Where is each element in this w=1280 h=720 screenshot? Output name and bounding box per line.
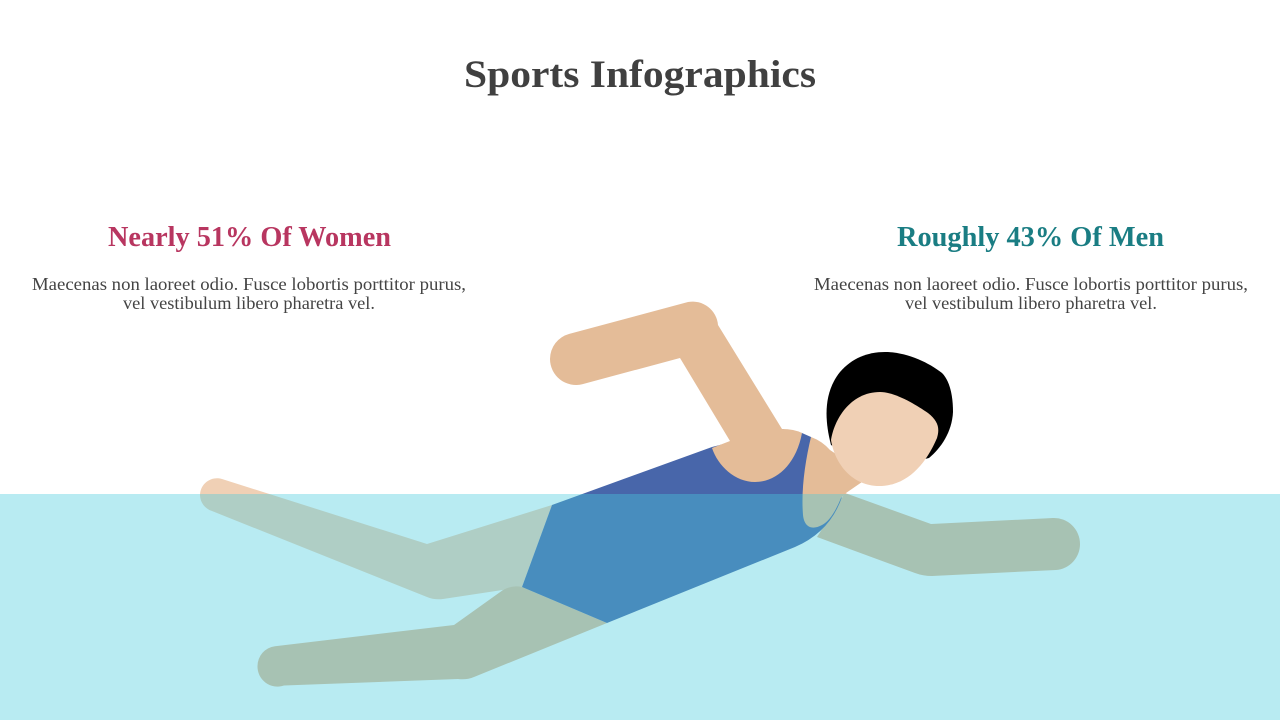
left body text [32,274,466,313]
title: Sports Infographics [464,53,816,96]
raised arm and shoulder [550,302,802,482]
reaching arm underwater [817,493,1080,576]
torso swimsuit [522,429,842,623]
swimmer illustration [200,302,1080,687]
right body text [814,274,1248,313]
face [831,392,938,486]
front leg [257,586,607,687]
right body text: Maecenas non laoreet odio. Fusce lobortis porttitor purus, [814,274,1248,294]
chest and neck [802,437,862,528]
hair [827,352,953,470]
water [0,494,1280,720]
right body text: vel vestibulum libero pharetra vel. [905,293,1157,313]
right heading: Roughly 43% Of Men [897,221,1164,253]
left callout: women [32,221,466,313]
left heading: Nearly 51% Of Women [108,221,391,253]
left body text: Maecenas non laoreet odio. Fusce lobortis porttitor purus, [32,274,466,294]
back leg [200,478,552,599]
left body text: vel vestibulum libero pharetra vel. [123,293,375,313]
right callout: men [814,221,1248,313]
